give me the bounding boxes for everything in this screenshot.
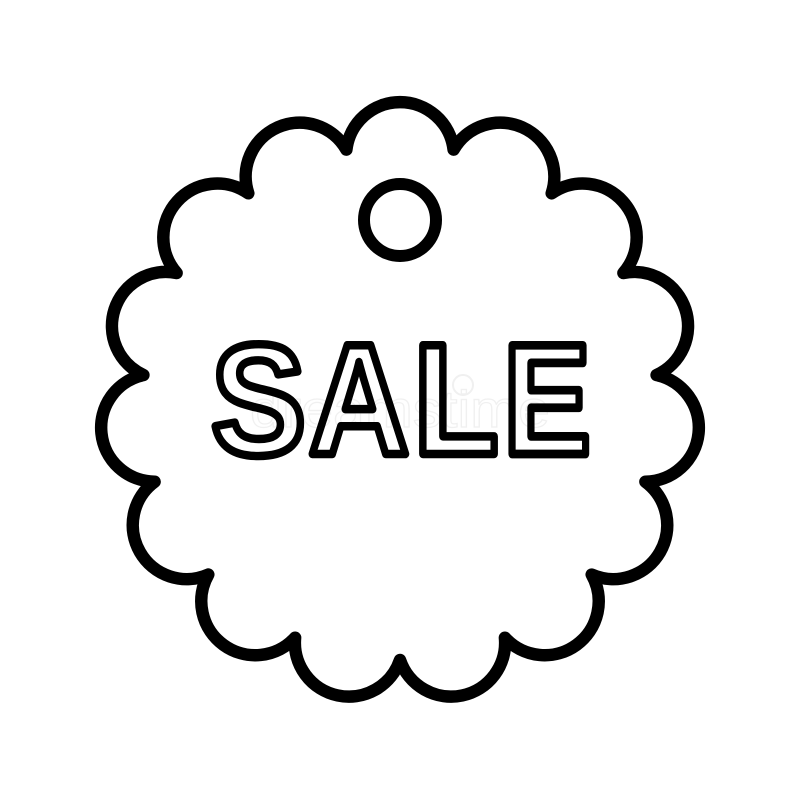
- heading: SALE outlined lettering: E: [503, 311, 591, 488]
- icon: tag hole: [364, 184, 436, 256]
- heading: SALE outlined lettering: S: [211, 312, 306, 488]
- watermark: dreamstime: [250, 381, 550, 439]
- heading: SALE outlined lettering: A: [309, 311, 409, 488]
- heading: SALE outlined lettering: L: [414, 311, 498, 488]
- icon: scalloped sale tag outline: [101, 102, 699, 697]
- heading: SALE outlined lettering: [211, 311, 591, 488]
